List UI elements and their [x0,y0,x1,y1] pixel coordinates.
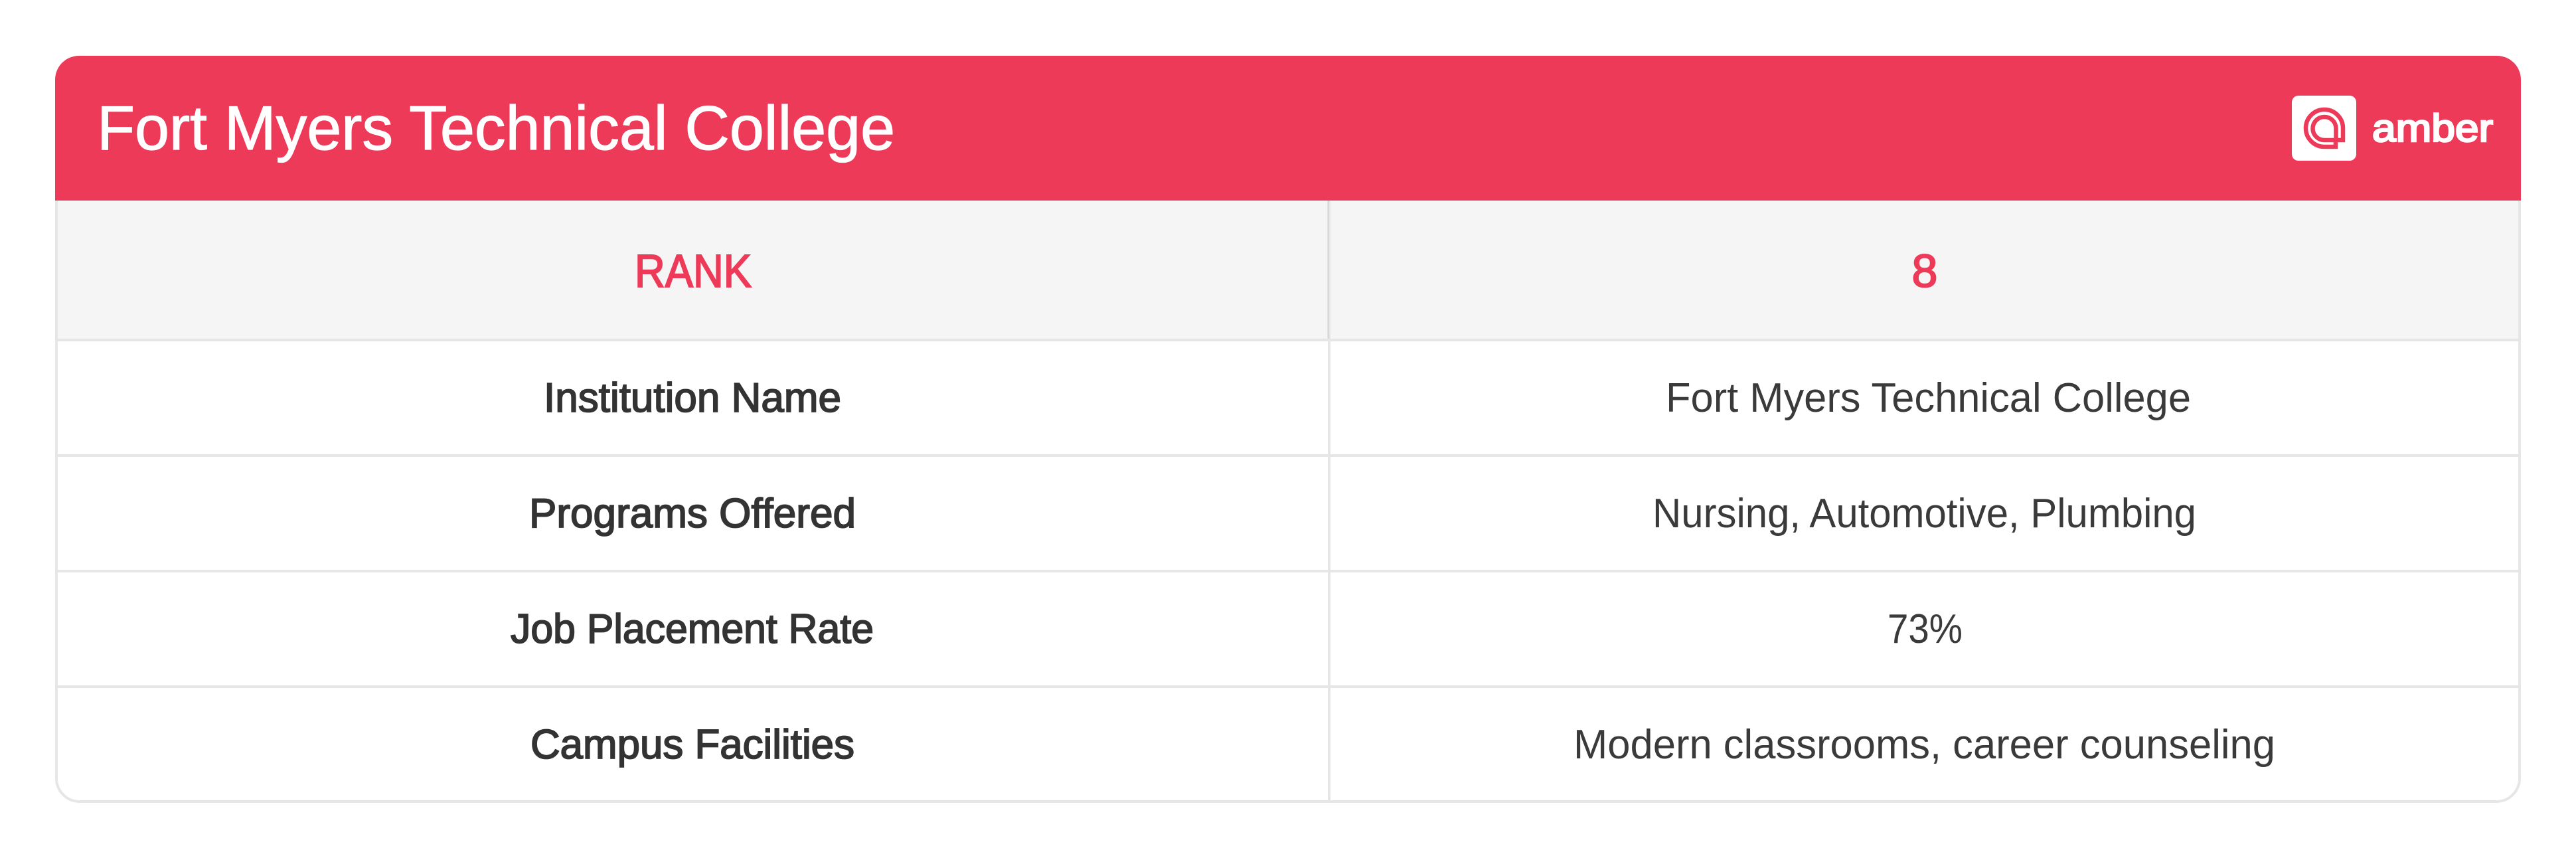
panel: rank row background [56,201,2520,339]
label: rank: RANK [635,245,752,297]
logo: amber [2292,96,2493,161]
value: rank: 8 [1912,245,1937,297]
row: programs offered [529,491,2196,537]
value: job placement rate: 73% [1888,606,1963,652]
row: campus facilities [530,722,2275,768]
label: campus facilities: Campus Facilities [530,722,854,768]
row: institution name [544,375,2191,421]
icon: amber logo mark [2292,96,2356,161]
label: institution name: Institution Name [544,375,841,421]
logo wordmark: amber [2372,107,2493,150]
value: campus facilities: Modern classrooms, career counseling [1573,722,2275,768]
value: institution name: Fort Myers Technical College [1666,375,2191,421]
value: programs offered: Nursing, Automotive, Plumbing [1652,491,2196,537]
label: job placement rate: Job Placement Rate [511,606,874,652]
row: job placement rate [511,606,1963,652]
header banner [55,56,2521,201]
title: Fort Myers Technical College [97,93,895,163]
label: programs offered: Programs Offered [529,491,856,537]
row: rank [635,245,1937,297]
